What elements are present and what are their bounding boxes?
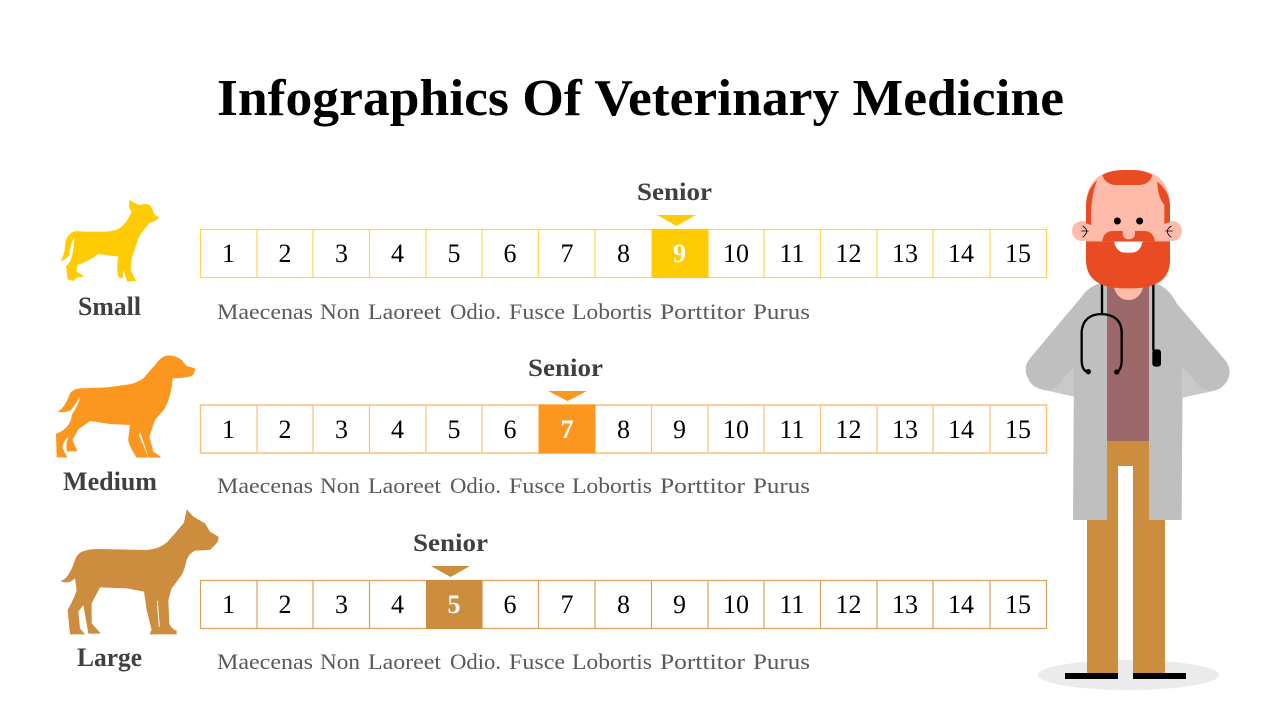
description: Odio. [450,473,501,498]
description: Porttitor [660,473,746,498]
age scale: 2 [278,239,292,268]
age scale: 1 [222,415,235,444]
senior marker: Senior [637,179,712,206]
panel: large dogs row [60,509,1046,674]
description: Fusce [509,299,565,324]
description: Maecenas [217,299,313,324]
shoes [1065,673,1186,679]
age scale: 2 [278,590,292,619]
label: small: Small [78,292,141,321]
senior marker: Senior [413,530,488,557]
age scale: 5 [448,239,460,268]
age scale [200,229,1046,278]
age scale: 15 [1005,590,1031,619]
age scale: 8 [617,415,630,444]
icon: small dog [61,199,159,282]
age scale: 4 [391,590,404,619]
title: Infographics Of Veterinary Medicine [217,70,1064,127]
age scale: 11 [779,239,805,268]
age scale: 14 [948,415,974,444]
description: Porttitor [660,299,746,324]
description: Non [320,649,360,674]
neck [1114,282,1143,300]
age scale: 7 [560,590,574,619]
age scale: 1 [222,239,235,268]
age scale [200,404,1046,454]
shirt [1107,285,1149,441]
age scale: 9 [673,590,686,619]
age scale: 3 [335,239,348,268]
age scale: 6 [504,239,516,268]
ground shadow [1038,660,1219,690]
description: Lobortis [572,473,652,498]
age scale: 12 [836,415,862,444]
age scale: 9 [673,239,686,268]
panel: medium dogs row [56,355,1047,498]
senior marker: Senior [528,355,603,382]
description: Purus [753,473,810,498]
description: Maecenas [217,473,313,498]
label: large: Large [77,643,142,672]
panel: small dogs row [61,179,1047,324]
description: Laoreet [368,299,441,324]
age scale: 2 [278,415,292,444]
age scale: 10 [723,239,749,268]
description: Fusce [509,473,565,498]
description: Porttitor [660,649,746,674]
age scale: 6 [504,590,516,619]
head [1072,170,1182,288]
age scale: 12 [836,590,862,619]
description: Lobortis [572,299,652,324]
age scale: 13 [892,415,918,444]
description: Fusce [509,649,565,674]
age scale: 7 [560,415,574,444]
age scale: 7 [560,239,574,268]
icon: large dog [60,509,218,634]
age scale: 15 [1005,239,1031,268]
age scale: 4 [391,239,404,268]
senior marker [528,355,603,401]
description: Non [320,473,360,498]
lab coat [1026,283,1230,520]
description: Laoreet [368,649,441,674]
age scale: 1 [222,590,235,619]
senior marker [637,179,712,226]
age scale: 11 [779,590,805,619]
age scale: 14 [948,590,974,619]
illustration: veterinarian [1026,170,1230,690]
description: Odio. [450,299,501,324]
age scale: 13 [892,239,918,268]
age scale: 3 [335,590,348,619]
age scale: 8 [617,590,630,619]
description: Maecenas [217,649,313,674]
age scale: 13 [892,590,918,619]
age scale: 14 [948,239,974,268]
age scale: 12 [836,239,862,268]
senior marker [413,530,488,577]
description: Laoreet [368,473,441,498]
description: Purus [753,299,810,324]
age scale: 6 [504,415,516,444]
age scale: 8 [617,239,630,268]
stethoscope [1082,282,1161,375]
age scale: 15 [1005,415,1031,444]
age scale: 3 [335,415,348,444]
description: Purus [753,649,810,674]
age scale: 4 [391,415,404,444]
age scale: 5 [448,590,460,619]
age scale: 10 [723,590,749,619]
icon: medium dog [56,356,195,458]
label: medium: Medium [63,467,157,496]
description: Lobortis [572,649,652,674]
age scale: 10 [723,415,749,444]
age scale: 5 [448,415,460,444]
description: Non [320,299,360,324]
age scale [200,580,1046,629]
description: Odio. [450,649,501,674]
age scale: 11 [779,415,805,444]
trousers [1087,441,1165,673]
age scale: 9 [673,415,686,444]
